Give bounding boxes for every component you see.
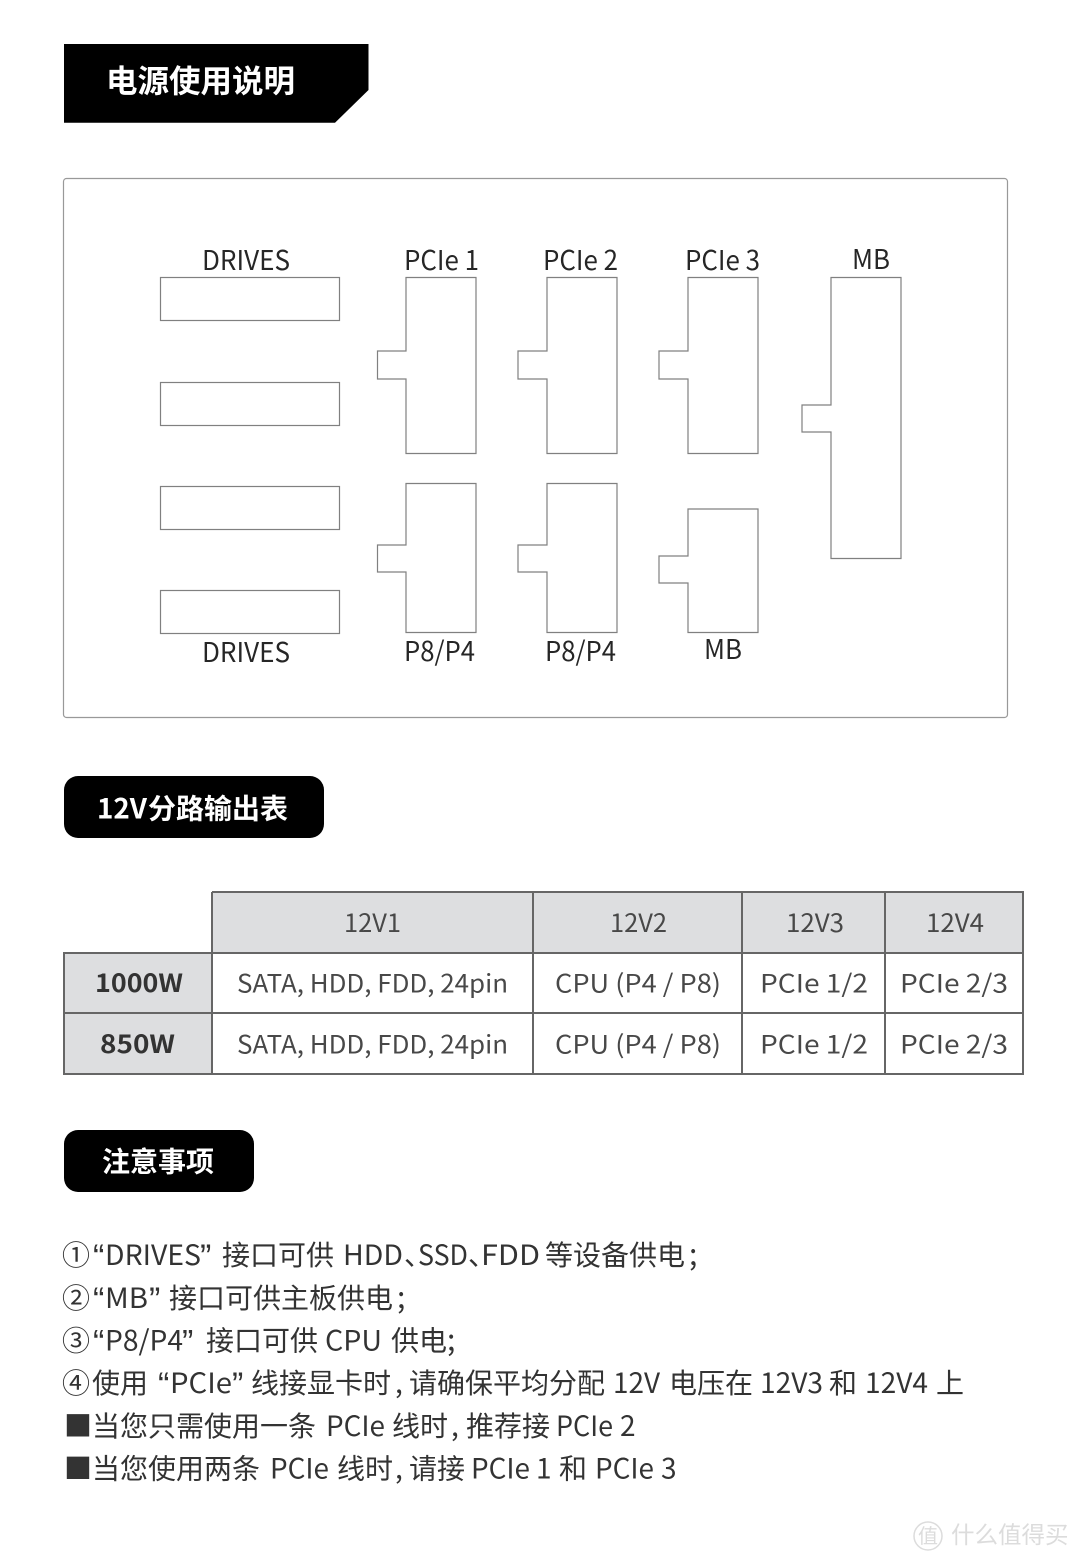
note 6: 和	[559, 1448, 587, 1488]
note 4: 电压在	[669, 1362, 753, 1402]
note 6: 3	[661, 1448, 677, 1488]
table: 12V rail output: 12V1	[344, 904, 401, 940]
note 5: PCIe	[326, 1405, 385, 1445]
note 2: ”	[149, 1281, 160, 1319]
table: 12V rail output: SATA, HDD, FDD, 24pin	[237, 964, 508, 1000]
note 4: ,	[395, 1362, 403, 1402]
note 6: PCIe	[595, 1448, 654, 1488]
heading: 12V output table	[64, 776, 324, 838]
table: 12V rail output: 12V2	[610, 904, 667, 940]
panel: connector diagram: PCIe 2	[543, 239, 618, 278]
note 4: 12V4	[865, 1362, 928, 1402]
note 4	[62, 1362, 964, 1404]
panel: connector diagram: P8/P4	[545, 630, 616, 669]
note 6: 请接	[409, 1448, 465, 1488]
note 1: 接口可供	[222, 1234, 334, 1274]
note 3: ③	[62, 1320, 90, 1360]
panel: connector diagram: DRIVES	[202, 631, 290, 670]
note 1: ①	[62, 1234, 90, 1274]
note 5: ,	[451, 1405, 459, 1445]
watermark: 值	[918, 1520, 938, 1549]
note 1: “	[93, 1238, 104, 1276]
note 5: 2	[620, 1405, 636, 1445]
table: 12V rail output: 850W	[100, 1025, 175, 1061]
note 6: ■	[64, 1448, 92, 1488]
note 2: MB	[105, 1277, 148, 1317]
note 4: 12V3	[760, 1362, 823, 1402]
note 3: P8/P4	[105, 1320, 183, 1360]
note 5: PCIe	[556, 1405, 613, 1445]
note 3: 供电	[391, 1320, 447, 1360]
table: 12V rail output: PCIe 1/2	[760, 1026, 868, 1062]
note 2: “	[93, 1281, 104, 1319]
note 1: FDD	[481, 1234, 540, 1274]
panel: connector diagram: DRIVES	[202, 239, 290, 278]
table: 12V rail output: 12V4	[926, 904, 984, 940]
note 3: “	[93, 1324, 104, 1362]
panel: connector diagram: PCIe 1	[404, 239, 479, 278]
note 4: 和	[829, 1362, 857, 1402]
table: 12V rail output: PCIe 2/3	[900, 964, 1008, 1000]
note 3: ”	[182, 1324, 193, 1362]
note 6: ,	[395, 1448, 403, 1488]
note 6: 线时	[337, 1448, 393, 1488]
note 6: 1	[536, 1448, 552, 1488]
note 4: “	[158, 1366, 169, 1404]
note 4: 12V	[613, 1362, 661, 1402]
heading: notes: 注意事项	[102, 1141, 214, 1181]
note 1	[62, 1230, 697, 1276]
note 4: PCIe	[170, 1362, 232, 1402]
heading: power usage: 电源使用说明	[106, 56, 295, 102]
panel: connector diagram	[64, 178, 1008, 718]
table: 12V rail output: PCIe 1/2	[760, 964, 868, 1000]
table: 12V rail output: CPU (P4 / P8)	[555, 1026, 721, 1062]
note 3	[62, 1316, 455, 1362]
note 1: 、	[404, 1234, 432, 1274]
note 1: ;	[689, 1230, 697, 1274]
note 1: 、	[468, 1234, 496, 1274]
note 6: PCIe	[471, 1448, 530, 1488]
note 3: ;	[447, 1316, 455, 1360]
note 2: ②	[62, 1277, 90, 1317]
heading: notes	[64, 1130, 254, 1192]
heading: 12V output table: 分路输出表	[148, 788, 288, 828]
note 4: 线接显卡时	[251, 1362, 391, 1402]
note 4: 上	[936, 1362, 964, 1402]
watermark: 什么值得买	[951, 1516, 1068, 1550]
note 5: ■	[64, 1405, 92, 1445]
heading: power usage	[64, 44, 368, 123]
note 6	[64, 1448, 677, 1488]
note 4: 使用	[92, 1362, 148, 1402]
note 5: 当您只需使用一条	[92, 1405, 316, 1445]
table: 12V rail output	[64, 892, 1023, 1074]
table: 12V rail output: CPU (P4 / P8)	[555, 964, 721, 1000]
note 4: 请确保平均分配	[409, 1362, 605, 1402]
note 5	[64, 1405, 636, 1445]
note 2	[62, 1273, 405, 1319]
heading: 12V output table: 12V	[97, 788, 148, 828]
note 1: DRIVES	[105, 1234, 201, 1274]
panel: connector diagram: PCIe 3	[685, 239, 760, 278]
panel: connector diagram: MB	[704, 628, 742, 667]
note 6: PCIe	[270, 1448, 329, 1488]
table: 12V rail output: PCIe 2/3	[900, 1026, 1008, 1062]
note 5: 线时	[392, 1405, 448, 1445]
panel: connector diagram: MB	[852, 238, 890, 277]
note 6: 当您使用两条	[92, 1448, 260, 1488]
note 2: ;	[397, 1273, 405, 1317]
table: 12V rail output: SATA, HDD, FDD, 24pin	[237, 1026, 508, 1062]
text block: notes list	[62, 1230, 964, 1488]
note 1: ”	[200, 1238, 211, 1276]
note 5: 推荐接	[466, 1405, 550, 1445]
note 2: 接口可供主板供电	[169, 1277, 393, 1317]
note 1: SSD	[418, 1234, 468, 1274]
note 1: HDD	[343, 1234, 403, 1274]
panel: connector diagram: P8/P4	[404, 630, 475, 669]
note 1: 等设备供电	[545, 1234, 685, 1274]
note 3: 接口可供	[206, 1320, 318, 1360]
note 4: ”	[232, 1366, 243, 1404]
table: 12V rail output: 12V3	[786, 904, 844, 940]
note 3: CPU	[325, 1320, 382, 1360]
table: 12V rail output: 1000W	[95, 964, 183, 1000]
note 4: ④	[62, 1362, 90, 1402]
